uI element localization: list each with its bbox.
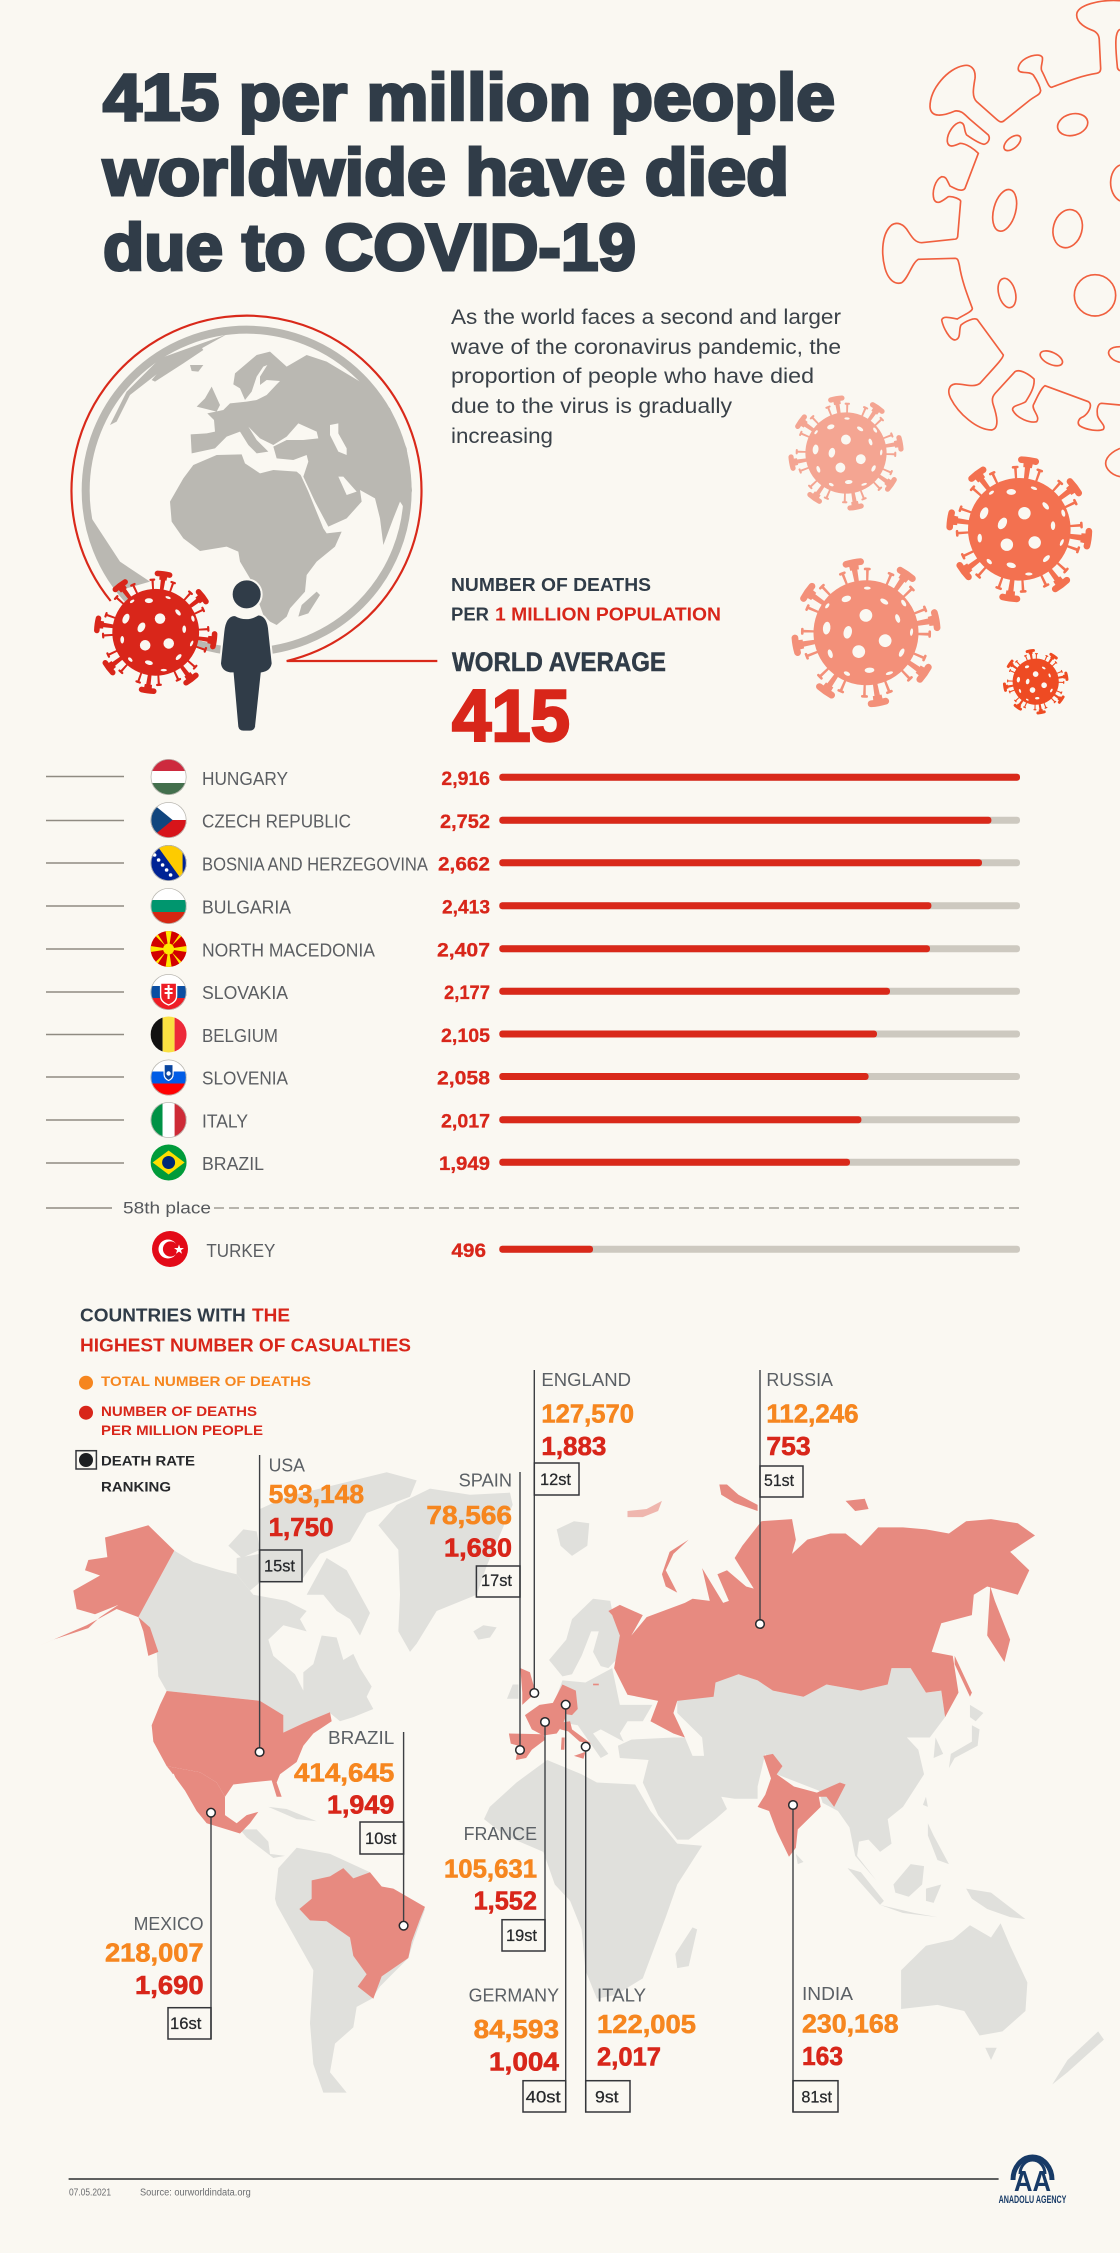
section heading: casualties: HIGHEST NUMBER OF CASUALTIES: [80, 1335, 411, 1356]
legend: deaths per million: [79, 1403, 263, 1438]
row: Turkey: [152, 1231, 1020, 1267]
row: Slovenia: [46, 1060, 1020, 1096]
globe illustration: [72, 316, 437, 732]
row: Bosnia and Herzegovina: 2,662: [438, 854, 490, 876]
row: Belgium: 2,105: [441, 1025, 490, 1047]
world average: [452, 647, 666, 757]
row: Hungary: HUNGARY: [202, 769, 288, 789]
logo: Anadolu Agency: [999, 2157, 1067, 2206]
callout: India: INDIA: [802, 1984, 853, 2004]
deaths per million heading: 1 MILLION POPULATION: [495, 604, 721, 624]
row: Brazil: BRAZIL: [202, 1154, 264, 1174]
intro text: [450, 306, 841, 448]
inland seas: [330, 423, 357, 495]
callout: France: [444, 1718, 549, 1951]
callout: USA: 15st: [264, 1557, 295, 1576]
row: Slovenia: 2,058: [437, 1068, 490, 1090]
row: North Macedonia: NORTH MACEDONIA: [202, 940, 375, 960]
callout: USA: USA: [269, 1456, 305, 1476]
callout: Italy: 9st: [595, 2088, 619, 2107]
callout: Germany: 40st: [526, 2088, 561, 2107]
world average: WORLD AVERAGE: [452, 647, 666, 677]
row: Hungary: 2,916: [441, 768, 490, 790]
callout: France: 19st: [506, 1926, 537, 1945]
pink: Alaska: [37, 1525, 174, 1656]
callout: England: ENGLAND: [541, 1370, 631, 1390]
callout: Spain: [426, 1471, 524, 1754]
row: Slovakia: [46, 974, 1020, 1010]
section heading: casualties: THE: [252, 1305, 290, 1326]
callout: Mexico: MEXICO: [134, 1914, 204, 1934]
callout: Russia: 112,246: [766, 1399, 859, 1429]
pink: Mexico: [167, 1766, 258, 1833]
callout: Germany: [469, 1700, 570, 2112]
pink: India: [758, 1754, 846, 1857]
world map west: [37, 1472, 513, 2093]
Gulf of California: [173, 1774, 185, 1803]
row: Brazil: [46, 1144, 1020, 1180]
callout: Brazil: BRAZIL: [328, 1728, 394, 1748]
row: Bosnia and Herzegovina: [46, 845, 1020, 881]
callout: India: [789, 1801, 899, 2112]
callout: USA: 1,750: [269, 1512, 334, 1542]
row: Italy: 2,017: [441, 1110, 490, 1132]
row: Czech Republic: CZECH REPUBLIC: [202, 812, 351, 832]
title: due to COVID-19: [103, 210, 636, 284]
legend: rate ranking: RANKING: [101, 1479, 171, 1495]
deaths per million heading: [451, 575, 721, 624]
pink: Germany: [553, 1684, 578, 1715]
pink: USA: [152, 1691, 332, 1797]
legend: rate ranking: DEATH RATE: [101, 1453, 195, 1469]
icon: salmon virus: [763, 530, 969, 735]
footer: [69, 2157, 1067, 2206]
globe landmasses: [90, 334, 412, 625]
callout: Russia: [756, 1370, 859, 1628]
legend: total deaths: TOTAL NUMBER OF DEATHS: [101, 1373, 311, 1389]
row: Brazil: 1,949: [439, 1153, 490, 1175]
callout: Spain: 1,680: [444, 1533, 512, 1563]
callout: Mexico: 218,007: [105, 1938, 204, 1968]
row: Czech Republic: [46, 802, 1020, 838]
deaths per million heading: NUMBER OF DEATHS: [451, 575, 651, 595]
row: Belgium: BELGIUM: [202, 1026, 278, 1046]
callout: Russia: 51st: [764, 1471, 794, 1490]
source: Source: ourworldindata.org: [140, 2188, 251, 2199]
icon: red virus: [88, 565, 223, 700]
row: Belgium: [46, 1016, 1020, 1052]
pink: Russia: [593, 1484, 1035, 1738]
intro text: increasing: [451, 425, 553, 448]
callout: India: 230,168: [802, 2008, 899, 2038]
icon: orange virus: [940, 450, 1099, 609]
row: Italy: ITALY: [202, 1112, 248, 1132]
callout: Brazil: [294, 1728, 408, 1930]
section heading: casualties: COUNTRIES WITH: [80, 1305, 246, 1326]
title: [102, 60, 835, 284]
row: Slovakia: SLOVAKIA: [202, 983, 288, 1003]
row: Slovakia: 2,177: [444, 982, 490, 1004]
callout: Spain: 17st: [481, 1571, 512, 1590]
logo: Anadolu Agency: AA: [1014, 2166, 1051, 2198]
pink: Italy: [557, 1721, 591, 1759]
legend: [76, 1373, 311, 1495]
intro text: proportion of people who have died: [451, 365, 814, 388]
pink: Spain: [509, 1733, 545, 1760]
icon: pale pink virus: [767, 374, 925, 532]
callout: England: 1,883: [541, 1431, 606, 1461]
logo: Anadolu Agency: ANADOLU AGENCY: [999, 2194, 1067, 2206]
callout: France: 1,552: [474, 1885, 537, 1915]
row: Bulgaria: 2,413: [442, 896, 490, 918]
callout: India: 163: [802, 2041, 843, 2071]
row: North Macedonia: [46, 931, 1020, 967]
row: Italy: [46, 1102, 1020, 1138]
icon: person: [220, 579, 273, 732]
callout: France: 105,631: [444, 1853, 537, 1883]
pink: Brazil: [299, 1868, 425, 1999]
callout: Italy: ITALY: [597, 1986, 646, 2006]
pink: France: [525, 1703, 566, 1736]
callout: Russia: 753: [766, 1431, 811, 1461]
row: Hungary: [46, 759, 1020, 795]
intro text: wave of the coronavirus pandemic, the: [450, 336, 841, 359]
intro text: As the world faces a second and larger: [451, 306, 841, 329]
icon: small red-orange virus: [991, 637, 1081, 727]
row: Bulgaria: BULGARIA: [202, 898, 291, 918]
ranking list: [46, 759, 1020, 1267]
callout: England: [530, 1370, 634, 1697]
row: Turkey: 496: [451, 1240, 486, 1262]
legend: deaths per million: NUMBER OF DEATHS: [101, 1403, 257, 1419]
grey lands east: [484, 1521, 1104, 2084]
icon: large outlined virus: [883, 0, 1120, 477]
callout: Germany: 84,593: [474, 2014, 559, 2044]
globe ring: [86, 330, 408, 652]
row: North Macedonia: 2,407: [437, 940, 490, 962]
callout: USA: [255, 1455, 364, 1756]
date: 07.05.2021: [69, 2188, 111, 2199]
callout: Germany: 1,004: [489, 2047, 560, 2077]
callout: USA: 593,148: [269, 1479, 364, 1509]
callout: Italy: [581, 1742, 696, 2112]
callout: Italy: 2,017: [597, 2042, 661, 2072]
callout: Russia: RUSSIA: [766, 1370, 833, 1390]
world map east: [484, 1484, 1104, 2084]
section heading: casualties: [80, 1305, 411, 1356]
callout: Mexico: [105, 1808, 215, 2039]
row: Slovenia: SLOVENIA: [202, 1068, 288, 1088]
pink: England: [520, 1668, 536, 1705]
callout: Germany: GERMANY: [469, 1986, 559, 2006]
callout: England: 12st: [540, 1470, 571, 1489]
title: 415 per million people: [103, 60, 835, 134]
callout: India: 81st: [801, 2088, 832, 2107]
row: Bosnia and Herzegovina: BOSNIA AND HERZEGOVINA: [202, 854, 428, 874]
callout: Italy: 122,005: [597, 2009, 696, 2039]
row: Bulgaria: [46, 888, 1020, 924]
intro text: due to the virus is gradually: [451, 395, 733, 418]
callout: Brazil: 1,949: [327, 1789, 394, 1819]
callout: Mexico: 1,690: [135, 1970, 204, 2000]
58th place divider: 58th place: [123, 1199, 211, 1218]
callout: Spain: 78,566: [426, 1500, 512, 1530]
callout: France: FRANCE: [464, 1824, 537, 1844]
row: Czech Republic: 2,752: [440, 811, 490, 833]
callout: Mexico: 16st: [170, 2014, 202, 2033]
callout: Spain: SPAIN: [459, 1471, 512, 1491]
callout: Brazil: 414,645: [294, 1758, 394, 1788]
legend: rate ranking: [76, 1451, 195, 1495]
legend: deaths per million: PER MILLION PEOPLE: [101, 1422, 263, 1438]
callout: England: 127,570: [541, 1399, 634, 1429]
world average: 415: [452, 676, 570, 757]
title: worldwide have died: [102, 135, 789, 209]
red arc and pointer line: [72, 316, 437, 661]
deaths per million heading: PER: [451, 604, 489, 624]
callout: Brazil: 10st: [365, 1829, 397, 1848]
grey lands west: [138, 1472, 513, 2093]
row: Turkey: TURKEY: [206, 1241, 275, 1261]
